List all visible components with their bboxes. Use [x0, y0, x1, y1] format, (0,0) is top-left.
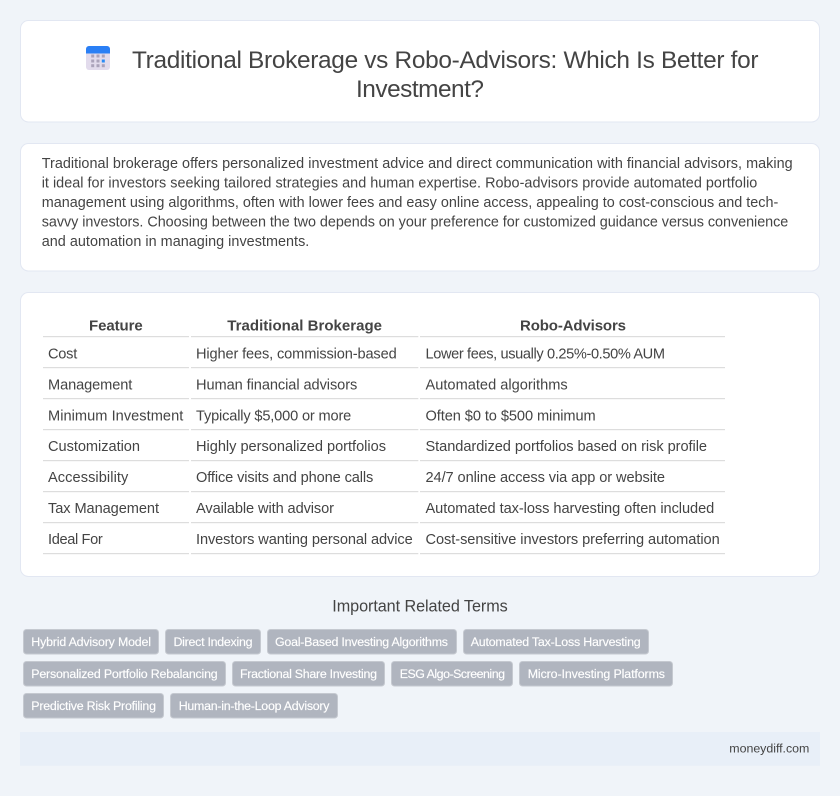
tag: micro-investing platforms: Micro-Investing Platforms [528, 667, 665, 681]
text block: introduction paragraph: Traditional brokerage offers personalized investment advice and direct communication with financial advisors, making [42, 156, 793, 172]
tag list: related terms [24, 630, 672, 718]
table row: minimum investment: Minimum Investment [48, 408, 183, 424]
tag: micro-investing platforms [520, 662, 672, 686]
tag: personalized portfolio rebalancing: Personalized Portfolio Rebalancing [31, 667, 218, 681]
table row: management: Automated algorithms [426, 377, 568, 393]
table row: tax management [48, 501, 714, 517]
table row: cost: Higher fees, commission-based [196, 346, 397, 362]
table row: tax management: Tax Management [48, 501, 159, 517]
text block: introduction paragraph: and automation in managing investments. [42, 234, 309, 250]
text block: introduction paragraph: it ideal for investors seeking tailored strategies and human expertise. Robo-advisors provide automated portfolio [42, 176, 757, 192]
tag: human-in-the-loop advisory [170, 694, 338, 718]
tag: esg algo-screening: ESG Algo-Screening [400, 667, 505, 681]
table header row: Feature [89, 318, 143, 334]
heading: important related terms: Important Related Terms [332, 598, 508, 616]
tag: fractional share investing: Fractional Share Investing [240, 667, 377, 681]
tag: automated tax-loss harvesting: Automated Tax-Loss Harvesting [471, 635, 641, 649]
table row: customization: Standardized portfolios based on risk profile [426, 439, 707, 455]
footer: moneydiff.com [729, 742, 809, 756]
table header row [89, 318, 626, 334]
text block: introduction paragraph: savvy investors. Choosing between the two depends on your preference for customized guidance versus convenience [42, 214, 788, 230]
table row: ideal for [48, 532, 720, 548]
table row: management: Human financial advisors [196, 377, 357, 393]
tag: direct indexing [166, 630, 260, 654]
table row: ideal for: Ideal For [48, 532, 103, 548]
table row: cost [48, 346, 665, 362]
table row: accessibility: 24/7 online access via app or website [426, 470, 665, 486]
tag: direct indexing: Direct Indexing [174, 635, 253, 649]
title: Traditional Brokerage vs Robo-Advisors: Which Is Better for [132, 47, 758, 74]
panel: introduction [20, 144, 820, 271]
table row: customization: Customization [48, 439, 140, 455]
tag: automated tax-loss harvesting [464, 630, 648, 654]
table row: cost: Cost [48, 346, 77, 362]
tag: predictive risk profiling [24, 694, 164, 718]
table row: customization [48, 439, 707, 455]
tag: hybrid advisory model: Hybrid Advisory Model [31, 635, 151, 649]
table header row: Robo-Advisors [520, 318, 626, 334]
panel: comparison table [20, 292, 820, 576]
icon: calendar [86, 46, 110, 70]
table row: minimum investment: Typically $5,000 or more [196, 408, 351, 424]
table row: management: Management [48, 377, 132, 393]
tag: hybrid advisory model [24, 630, 158, 654]
table row: ideal for: Cost-sensitive investors preferring automation [426, 532, 720, 548]
tag: goal-based investing algorithms [268, 630, 456, 654]
text block: introduction paragraph [42, 156, 793, 250]
table row: accessibility: Accessibility [48, 470, 129, 486]
table row: tax management: Automated tax-loss harvesting often included [426, 501, 714, 517]
footer [20, 732, 820, 766]
table row: customization: Highly personalized portfolios [196, 439, 386, 455]
table header row: Traditional Brokerage [227, 318, 382, 334]
table row: tax management: Available with advisor [196, 501, 334, 517]
table row: ideal for: Investors wanting personal advice [196, 532, 413, 548]
table row: minimum investment [48, 408, 596, 424]
title: Investment? [356, 76, 484, 103]
table row: accessibility: Office visits and phone calls [196, 470, 373, 486]
tag: human-in-the-loop advisory: Human-in-the-Loop Advisory [179, 699, 330, 713]
table row: cost: Lower fees, usually 0.25%-0.50% AUM [426, 346, 665, 362]
panel: header [20, 20, 820, 122]
tag: fractional share investing [232, 662, 384, 686]
tag: goal-based investing algorithms: Goal-Based Investing Algorithms [275, 635, 448, 649]
table row: management [48, 377, 568, 393]
tag: predictive risk profiling: Predictive Risk Profiling [31, 699, 156, 713]
text block: introduction paragraph: management using algorithms, often with lower fees and easy online access, appealing to cost-conscious and tech- [42, 195, 779, 211]
table row: minimum investment: Often $0 to $500 minimum [426, 408, 596, 424]
tag: esg algo-screening [392, 662, 512, 686]
tag: personalized portfolio rebalancing [24, 662, 226, 686]
title [132, 47, 758, 103]
table row: accessibility [48, 470, 665, 486]
